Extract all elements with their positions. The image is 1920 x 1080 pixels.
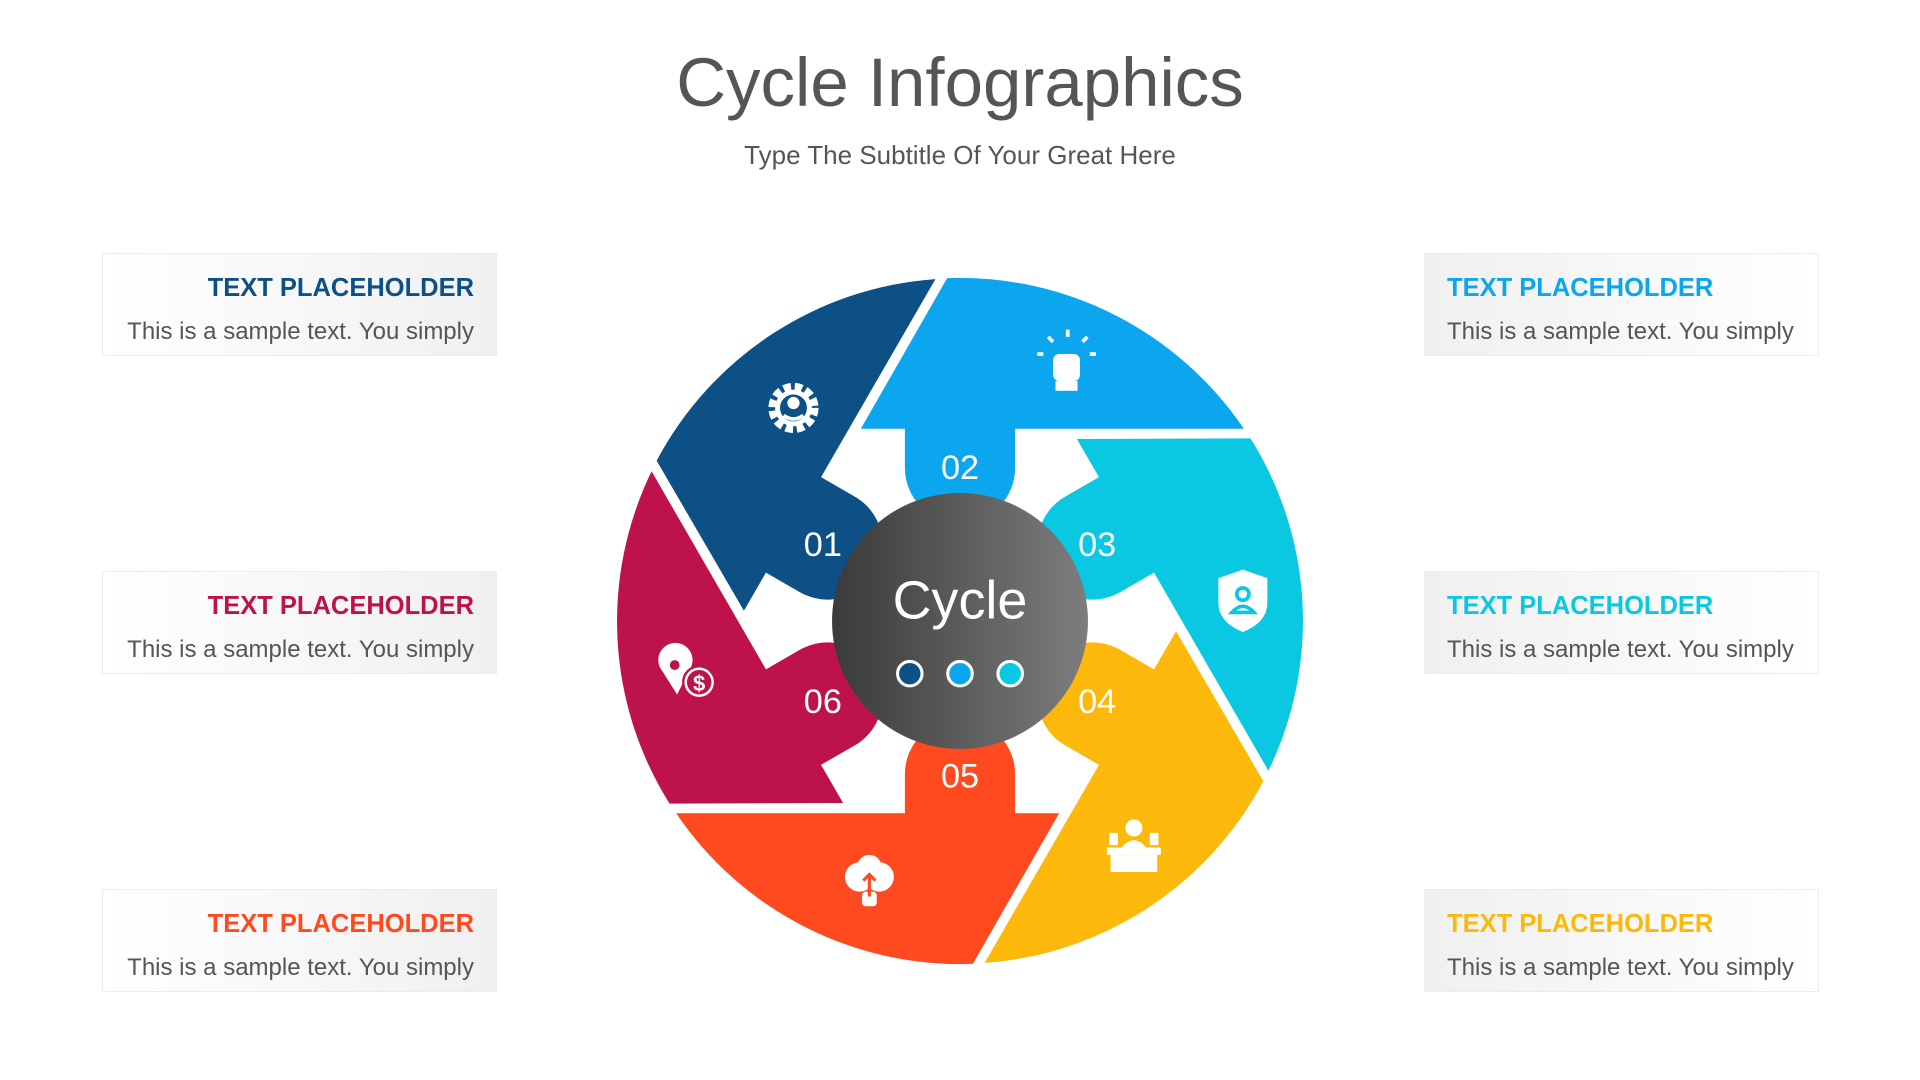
segment 04 <box>903 584 1307 1038</box>
text box 03 <box>1424 571 1819 674</box>
text box 03: This is a sample text. You simply <box>1447 636 1794 663</box>
numbers: 03 <box>1078 526 1116 564</box>
text box 05: TEXT PLACEHOLDER <box>208 910 474 938</box>
text box 06: This is a sample text. You simply <box>127 636 474 663</box>
numbers: 02 <box>941 449 979 487</box>
segment 05 <box>676 719 1059 964</box>
text box 02 <box>1424 253 1819 356</box>
center circle: Cycle <box>893 571 1027 631</box>
text box 06 <box>102 571 497 674</box>
subtitle: Type The Subtitle Of Your Great Here <box>744 140 1176 170</box>
title: Cycle Infographics <box>676 44 1244 121</box>
segment 03 <box>995 364 1399 818</box>
text box 02: This is a sample text. You simply <box>1447 318 1794 345</box>
numbers <box>804 449 1116 796</box>
segment 06 <box>521 424 925 878</box>
text box 04 <box>1424 889 1819 992</box>
text box 05: This is a sample text. You simply <box>127 954 474 981</box>
icon: gear <box>773 387 814 429</box>
text box 01: TEXT PLACEHOLDER <box>208 274 474 302</box>
icon: pin dollar <box>658 643 715 698</box>
icon: brain bulb <box>845 855 894 906</box>
numbers: 06 <box>804 683 842 721</box>
text box 03: TEXT PLACEHOLDER <box>1447 592 1713 620</box>
text box 04: This is a sample text. You simply <box>1447 954 1794 981</box>
icon: podium <box>1107 819 1161 872</box>
text box 02: TEXT PLACEHOLDER <box>1447 274 1713 302</box>
segment 02 <box>861 278 1244 523</box>
text box 06: TEXT PLACEHOLDER <box>208 592 474 620</box>
icon: pin dollar: $ <box>693 671 705 696</box>
center circle <box>832 493 1088 749</box>
numbers: 05 <box>941 758 979 796</box>
text box 01: This is a sample text. You simply <box>127 318 474 345</box>
text box 04: TEXT PLACEHOLDER <box>1447 910 1713 938</box>
numbers: 01 <box>804 526 842 564</box>
icon: fist <box>1037 330 1096 391</box>
icon: shield <box>1218 570 1267 632</box>
text box 05 <box>102 889 497 992</box>
text box 01 <box>102 253 497 356</box>
numbers: 04 <box>1078 683 1116 721</box>
segment 01 <box>613 204 1017 658</box>
